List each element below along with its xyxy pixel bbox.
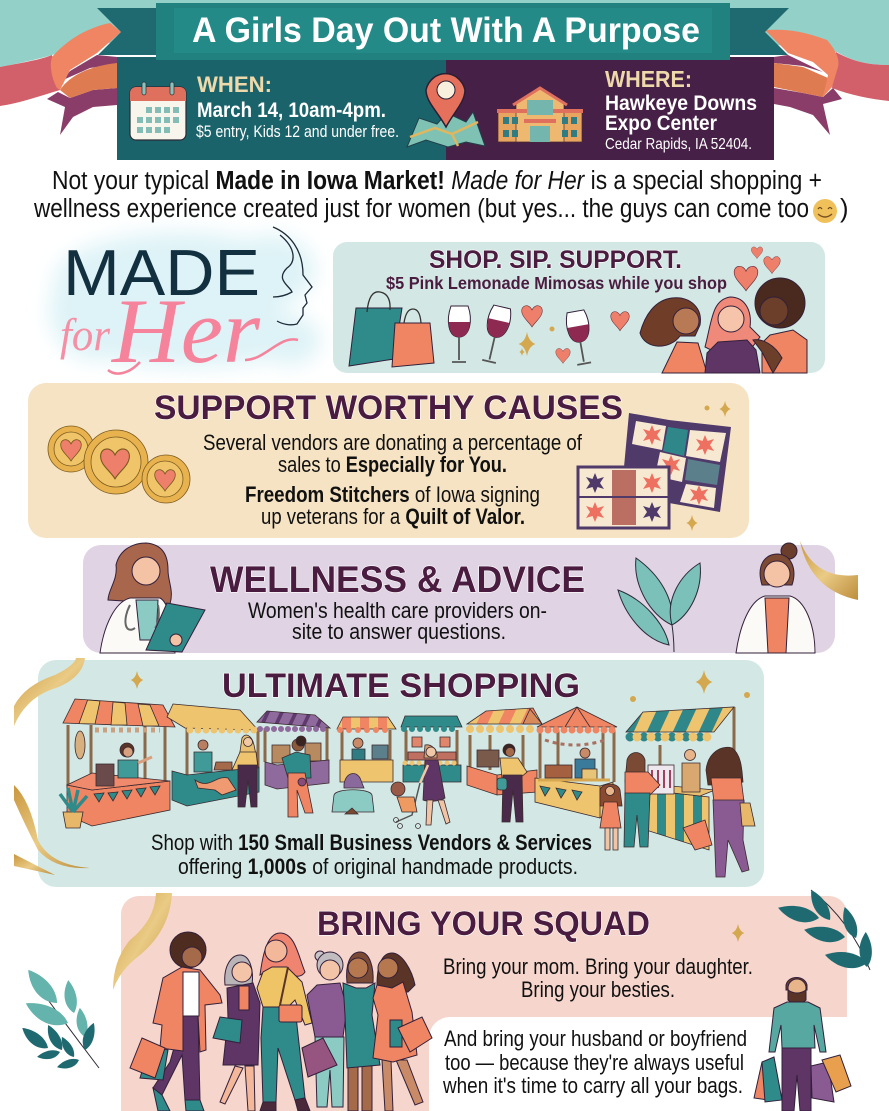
icon: quilts [578, 401, 731, 531]
text: donations: sales to Especially for You. [278, 452, 507, 477]
stall 6 [467, 708, 542, 822]
text: bring your husband: And bring your husband or boyfriend [444, 1026, 747, 1051]
shopper with stroller [391, 745, 450, 828]
stall 2 [167, 704, 259, 807]
woman 6 [373, 953, 432, 1111]
logo: Made for Her: for [60, 309, 111, 360]
panel: bring your squad: BRING YOUR SQUAD [317, 905, 650, 943]
when text: $5 entry, Kids 12 and under free. [196, 122, 399, 141]
text: wellness description: Women's health care providers on- [248, 598, 547, 623]
icon: wine glasses [448, 304, 595, 365]
illustration: market stalls [60, 699, 755, 877]
text: donations [203, 430, 583, 529]
woman 2 [213, 955, 260, 1111]
text: shopping description [151, 830, 592, 879]
text: donations: Freedom Stitchers of Iowa signing [245, 482, 540, 507]
icon: map and pin [407, 74, 485, 147]
illustration: man carrying bags [754, 978, 851, 1111]
text: shopping description: offering 1,000s of original handmade products. [178, 854, 578, 879]
panel: wellness and advice [83, 541, 858, 653]
logo: Made for Her: MADE [63, 236, 260, 309]
header ribbons background [0, 0, 889, 135]
when text [196, 72, 399, 141]
leaves: upper right [776, 887, 872, 971]
woman 4 [302, 951, 347, 1107]
icon: shopping bags [349, 292, 434, 367]
woman 5 [343, 952, 380, 1111]
intro text [33, 167, 848, 223]
title banner [156, 3, 730, 60]
stall 1 [63, 699, 175, 826]
illustration: group of women [130, 932, 432, 1111]
panel: ultimate shopping [14, 658, 764, 887]
table with goods [332, 773, 374, 814]
decoration: gold ribbons [14, 658, 90, 875]
illustration: doctor in white coat [736, 543, 815, 653]
where text: WHERE: [605, 66, 692, 92]
panel: support worthy causes [28, 383, 749, 538]
woman 3 [257, 933, 312, 1111]
text: donations: Several vendors are donating a percentage of [203, 430, 583, 455]
panel: wellness and advice: WELLNESS & ADVICE [210, 559, 585, 600]
text: shopping description: Shop with 150 Small Business Vendors & Services [151, 830, 592, 855]
stall 3 [257, 711, 330, 817]
text: wellness description: site to answer questions. [292, 619, 506, 644]
panel: shop sip support [333, 242, 825, 373]
icon: heart coins [48, 426, 190, 503]
intro text: wellness experience created just for women (but yes... the guys can come too [33, 195, 809, 223]
logo: Made for Her [50, 227, 320, 382]
text: bring your mom: Bring your besties. [521, 977, 675, 1002]
text: bring your husband: when it's time to carry all your bags. [442, 1073, 743, 1098]
panel: ultimate shopping: ULTIMATE SHOPPING [222, 667, 580, 705]
illustration: leaves [618, 558, 700, 652]
text: wellness description [248, 598, 547, 644]
icon: smile emoji [813, 199, 837, 223]
text: donations: up veterans for a Quilt of Valor. [261, 504, 525, 529]
intro text: ) [840, 195, 848, 223]
where text: Expo Center [605, 112, 717, 135]
icon: face profile [273, 227, 312, 325]
where text [605, 66, 757, 153]
when text: March 14, 10am-4pm. [197, 99, 386, 122]
stall 5 [401, 716, 462, 782]
when text: WHEN: [197, 72, 272, 97]
plant [60, 788, 87, 828]
intro text: Not your typical Made in Iowa Market! Made for Her is a special shopping + [52, 167, 822, 195]
stall 8 [626, 707, 734, 850]
text: bring your husband [442, 1026, 747, 1098]
stall 7 [535, 707, 617, 818]
panel: when and where [117, 57, 774, 160]
icon: calendar [130, 82, 186, 140]
where text: Cedar Rapids, IA 52404. [605, 136, 752, 153]
woman 1 [130, 932, 222, 1111]
text: bring your mom [443, 954, 753, 1002]
logo: Made for Her: Her [111, 280, 261, 382]
text: bring your husband: too — because they're always useful [445, 1050, 744, 1075]
panel: shop sip support: SHOP. SIP. SUPPORT. [429, 246, 682, 274]
title banner: A Girls Day Out With A Purpose [192, 11, 700, 50]
sparkles [131, 670, 750, 702]
shopper with child [600, 752, 660, 850]
illustration: doctor with clipboard [100, 543, 205, 653]
stall 4 [337, 717, 396, 782]
panel: bring your squad [113, 893, 851, 1111]
decoration: gold ribbon [113, 893, 172, 990]
where text: Hawkeye Downs [605, 92, 757, 115]
icon: expo building [497, 88, 583, 142]
text: bring your mom: Bring your mom. Bring your daughter. [443, 954, 753, 979]
logo flourishes [108, 339, 298, 374]
shopper with bags [683, 747, 755, 877]
icon: hearts and sparkles [519, 247, 780, 363]
decoration: gold ribbon [800, 541, 858, 600]
illustration: three women [640, 278, 807, 373]
panel: shop sip support: $5 Pink Lemonade Mimosas while you shop [386, 273, 727, 293]
leaves: lower left [18, 965, 99, 1072]
panel: support worthy causes: SUPPORT WORTHY CAUSES [154, 389, 623, 427]
